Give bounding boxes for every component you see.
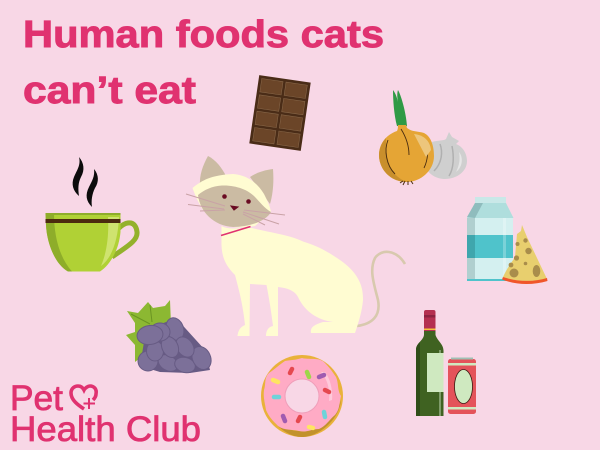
icon: grapes — [126, 300, 215, 375]
icon: cat — [186, 156, 405, 336]
steam — [73, 157, 98, 207]
sprinkles — [273, 369, 329, 428]
icon: wine bottle — [416, 310, 444, 416]
title: can’t eat — [23, 70, 196, 112]
icon: milk carton — [467, 197, 514, 281]
title: Human foods cats — [23, 14, 384, 56]
body — [222, 226, 363, 336]
logo — [10, 379, 201, 449]
icon: coffee cup with steam — [46, 157, 137, 272]
logo: Pet — [10, 379, 63, 418]
head — [192, 174, 271, 228]
collar — [221, 226, 250, 236]
icon: heart plus — [71, 386, 96, 409]
logo: Health Club — [10, 410, 201, 449]
icon: cheese wedge — [502, 225, 548, 284]
ears — [200, 156, 226, 187]
icon: chocolate bar — [249, 75, 311, 151]
icon: garlic — [426, 132, 467, 179]
eyes and nose — [222, 194, 227, 199]
icon: donut — [261, 355, 343, 437]
whiskers — [186, 194, 285, 225]
icon: soda can — [448, 358, 476, 414]
icon: onion — [379, 90, 434, 185]
title — [23, 14, 384, 112]
tail — [357, 252, 405, 326]
